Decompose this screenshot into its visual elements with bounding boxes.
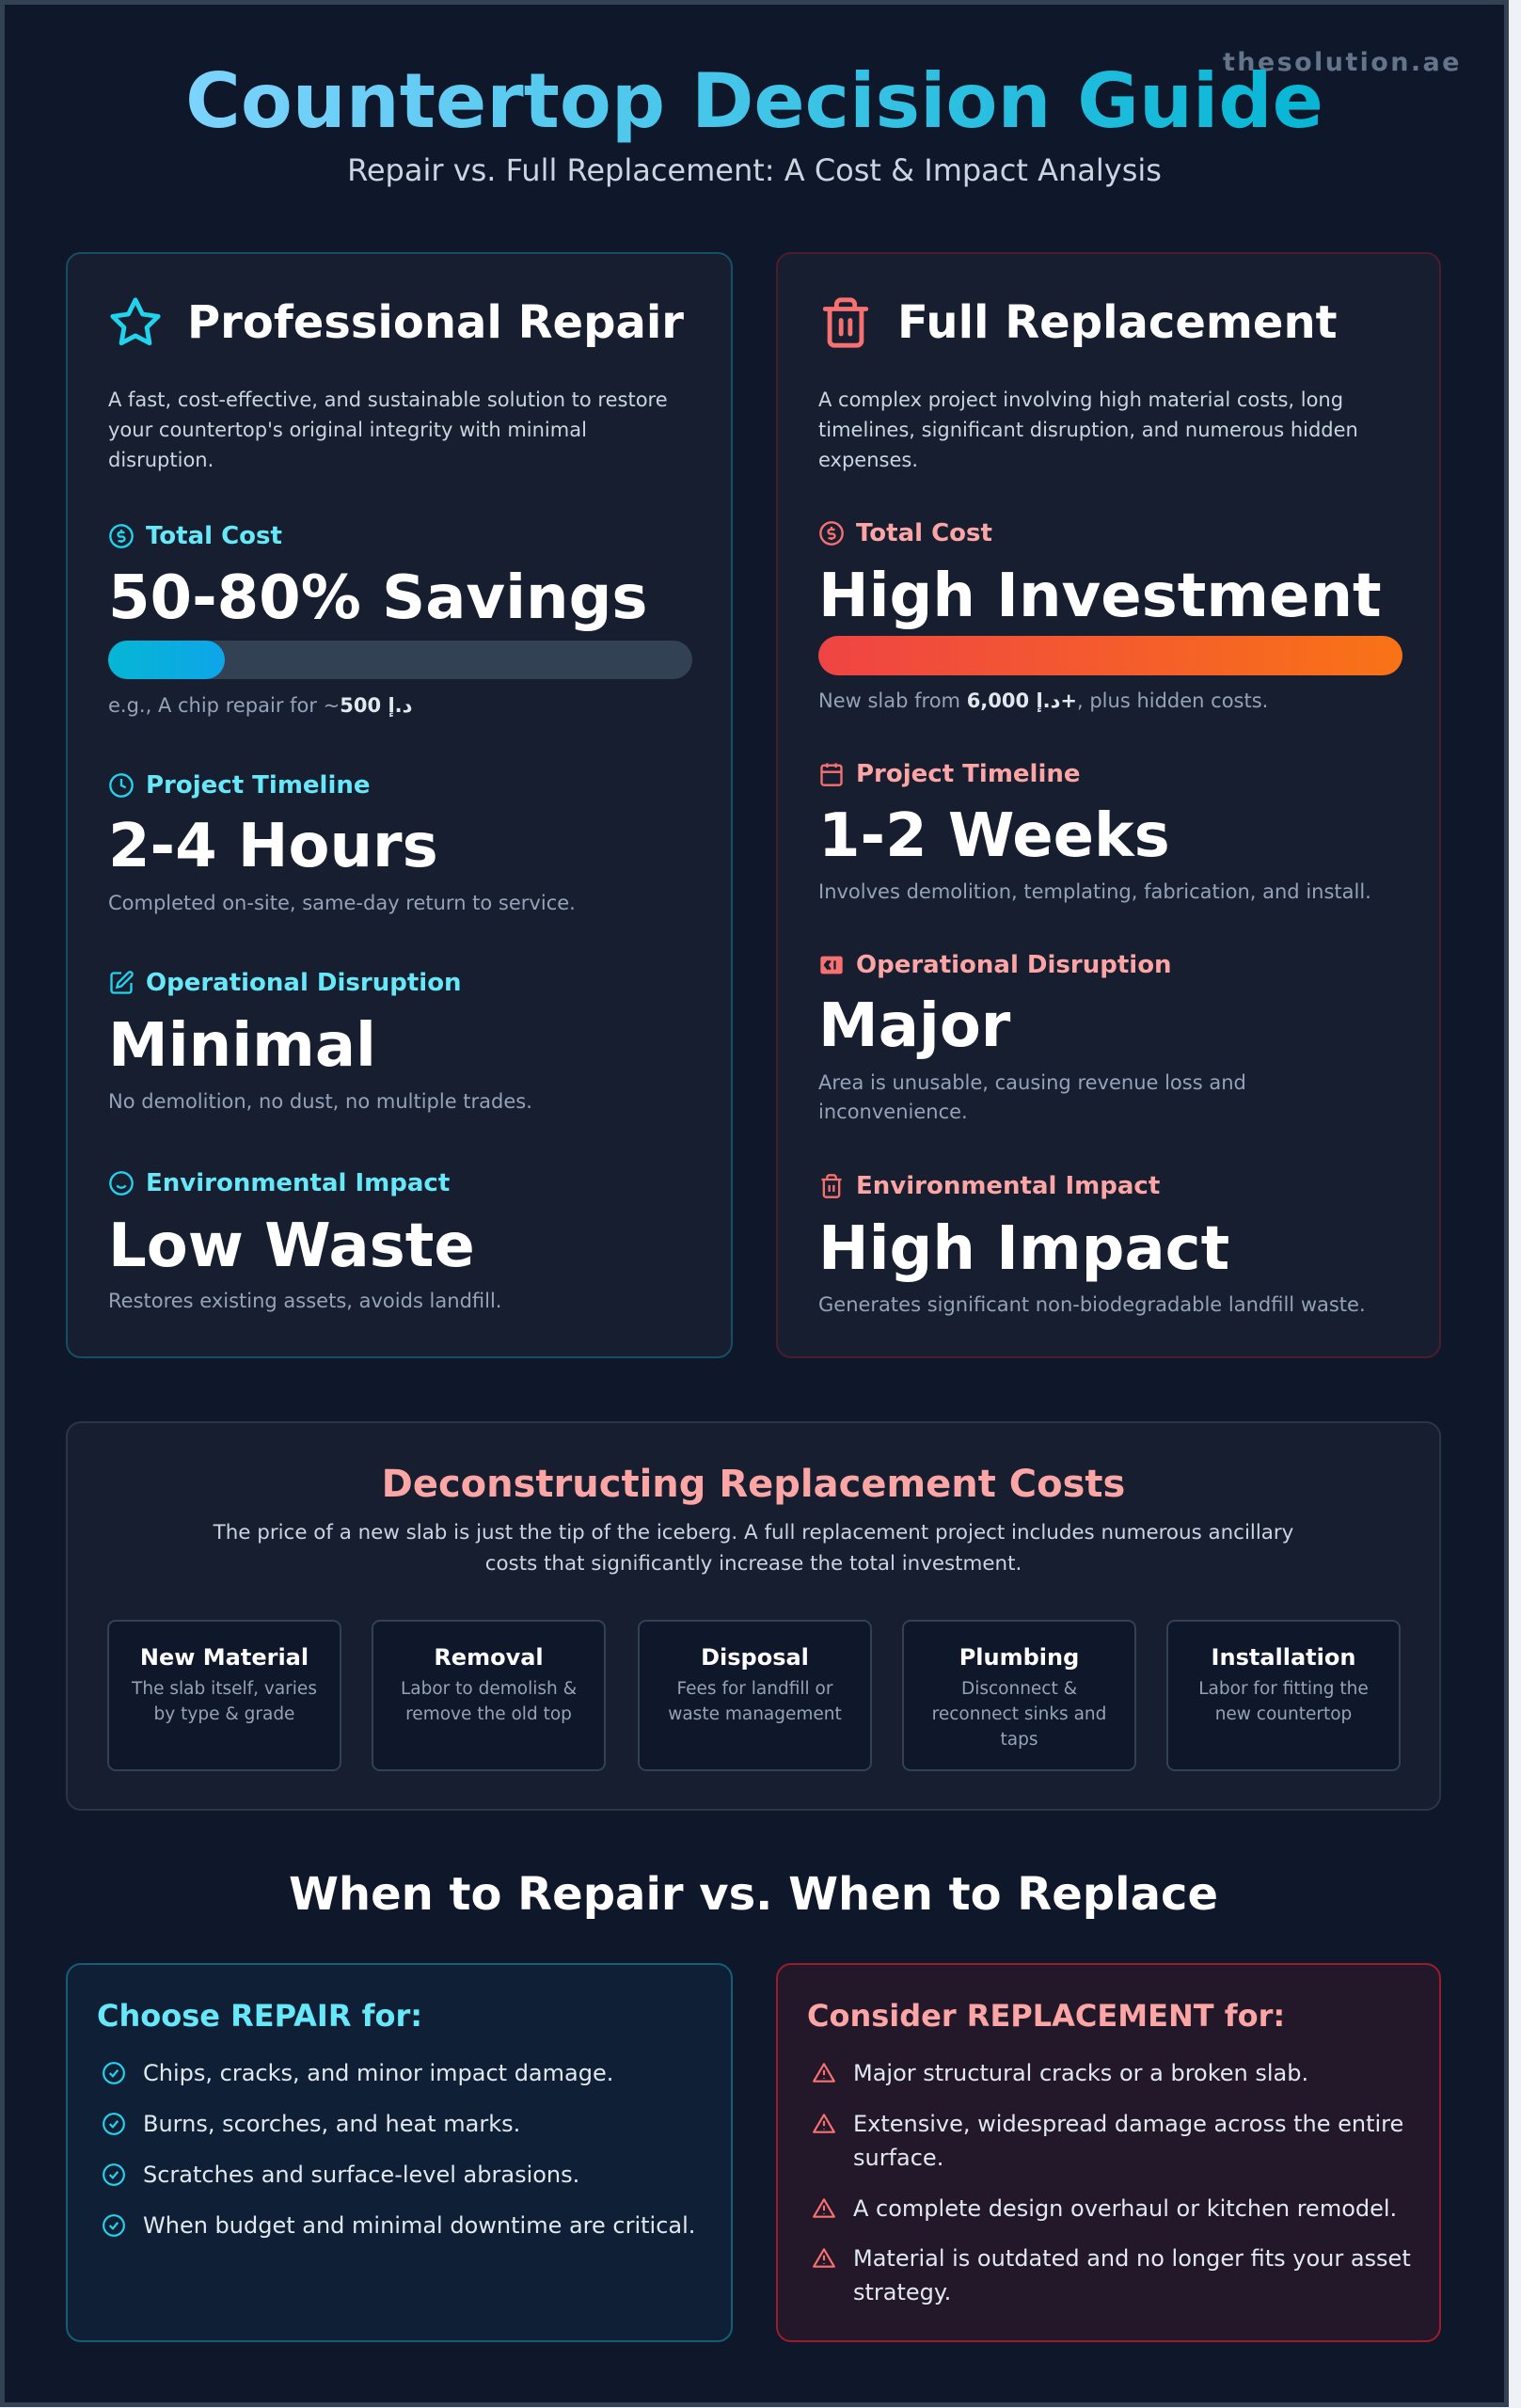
- panel: professional repair: Restores existing assets, avoids landfill.: [108, 1290, 501, 1312]
- cost item: disposal: [638, 1620, 872, 1771]
- panel: choose repair: [66, 1963, 733, 2342]
- label: timeline: Project Timeline: [856, 760, 1081, 788]
- panel: full replacement: Involves demolition, templating, fabrication, and install.: [818, 880, 1371, 903]
- list: Burns, scorches, and heat marks.: [143, 2111, 520, 2137]
- cost item: disposal: Fees for landfill or: [677, 1679, 832, 1699]
- watermark: thesolution.ae: [1223, 48, 1462, 77]
- list: [813, 2060, 1411, 2305]
- cost bar: [818, 636, 1402, 675]
- value: hours: 2-4 Hours: [108, 812, 438, 881]
- panel: consider replacement: [776, 1963, 1441, 2342]
- cost item: new material: [107, 1620, 341, 1771]
- panel: professional repair: No demolition, no dust, no multiple trades.: [108, 1090, 532, 1113]
- heading: Deconstructing Replacement Costs: [382, 1463, 1125, 1506]
- heading: Choose REPAIR for:: [97, 1998, 422, 2034]
- value: high investment: High Investment: [818, 562, 1382, 631]
- panel: full replacement: Area is unusable, causing revenue loss and: [818, 1071, 1246, 1094]
- panel: professional repair: [66, 252, 733, 1358]
- cost item: plumbing: Plumbing: [959, 1644, 1079, 1671]
- description: disruption.: [108, 449, 214, 471]
- cost item: plumbing: [902, 1620, 1136, 1771]
- heading: full replacement: Full Replacement: [897, 296, 1338, 349]
- cost item: disposal: waste management: [668, 1704, 842, 1724]
- cost item: plumbing: reconnect sinks and: [932, 1704, 1106, 1724]
- description: timelines, significant disruption, and numerous hidden: [818, 419, 1358, 441]
- cost item: removal: Removal: [434, 1644, 544, 1671]
- description: The price of a new slab is just the tip of the iceberg. A full replacement project includes numerous ancillary: [214, 1521, 1293, 1545]
- cost item: installation: new countertop: [1215, 1704, 1352, 1724]
- list: When budget and minimal downtime are critical.: [143, 2212, 695, 2239]
- list: strategy.: [853, 2279, 951, 2305]
- panel: deconstructing costs: [66, 1421, 1441, 1811]
- value: minimal: Minimal: [108, 1011, 376, 1081]
- value: savings: 50-80% Savings: [108, 563, 647, 633]
- cost item: installation: Installation: [1212, 1644, 1355, 1671]
- cost item: installation: Labor for fitting the: [1198, 1679, 1369, 1699]
- cost item: installation: [1166, 1620, 1401, 1771]
- label: disruption: Operational Disruption: [146, 969, 462, 997]
- section heading: When to Repair vs. When to Replace: [289, 1868, 1218, 1921]
- heading: professional repair: Professional Repair: [187, 296, 684, 349]
- label: total cost: Total Cost: [856, 519, 992, 547]
- cost item: new material: by type & grade: [154, 1704, 294, 1724]
- title: Countertop Decision Guide: [185, 57, 1323, 145]
- cost item: plumbing: taps: [1001, 1730, 1038, 1750]
- cost item: new material: The slab itself, varies: [132, 1679, 317, 1699]
- cost item: plumbing: Disconnect &: [961, 1679, 1077, 1699]
- label: environment: Environmental Impact: [856, 1172, 1160, 1200]
- list: Chips, cracks, and minor impact damage.: [143, 2060, 613, 2086]
- description: A fast, cost-effective, and sustainable solution to restore: [108, 388, 668, 411]
- cost item: disposal: Disposal: [701, 1644, 809, 1671]
- list: surface.: [853, 2145, 943, 2171]
- label: total cost: Total Cost: [146, 522, 282, 550]
- note: e.g., A chip repair for ~500 د.إ: [108, 694, 412, 717]
- label: environment: Environmental Impact: [146, 1169, 450, 1197]
- value: high impact: High Impact: [818, 1214, 1229, 1284]
- value: weeks: 1-2 Weeks: [818, 801, 1170, 871]
- progress bar: [108, 641, 692, 679]
- description: your countertop's original integrity with minimal: [108, 419, 587, 441]
- cost item: removal: Labor to demolish &: [401, 1679, 577, 1699]
- description: [108, 388, 668, 471]
- description: [213, 1521, 1293, 1576]
- note: New slab from 6,000 د.إ+, plus hidden costs.: [818, 689, 1268, 712]
- cost item: removal: remove the old top: [405, 1704, 572, 1724]
- panel: full replacement: [776, 252, 1441, 1358]
- panel: full replacement: Generates significant non-biodegradable landfill waste.: [818, 1293, 1366, 1316]
- heading: Consider REPLACEMENT for:: [807, 1998, 1285, 2034]
- panel: professional repair: Completed on-site, same-day return to service.: [108, 892, 576, 914]
- label: disruption: Operational Disruption: [856, 951, 1172, 979]
- cost item: new material: New Material: [140, 1644, 309, 1671]
- list: Material is outdated and no longer fits your asset: [853, 2245, 1411, 2272]
- description: expenses.: [818, 449, 918, 471]
- list: [103, 2060, 695, 2239]
- panel: full replacement: inconvenience.: [818, 1101, 968, 1123]
- value: low waste: Low Waste: [108, 1212, 475, 1281]
- list: Extensive, widespread damage across the entire: [853, 2111, 1403, 2137]
- value: major: Major: [818, 991, 1010, 1061]
- list: Scratches and surface-level abrasions.: [143, 2162, 579, 2188]
- description: A complex project involving high material costs, long: [818, 388, 1343, 411]
- list: Major structural cracks or a broken slab.: [853, 2060, 1308, 2086]
- subtitle: Repair vs. Full Replacement: A Cost & Impact Analysis: [347, 152, 1162, 188]
- list: A complete design overhaul or kitchen remodel.: [853, 2195, 1397, 2222]
- description: [818, 388, 1358, 471]
- label: timeline: Project Timeline: [146, 771, 371, 800]
- cost item: removal: [372, 1620, 606, 1771]
- description: costs that significantly increase the total investment.: [485, 1552, 1022, 1576]
